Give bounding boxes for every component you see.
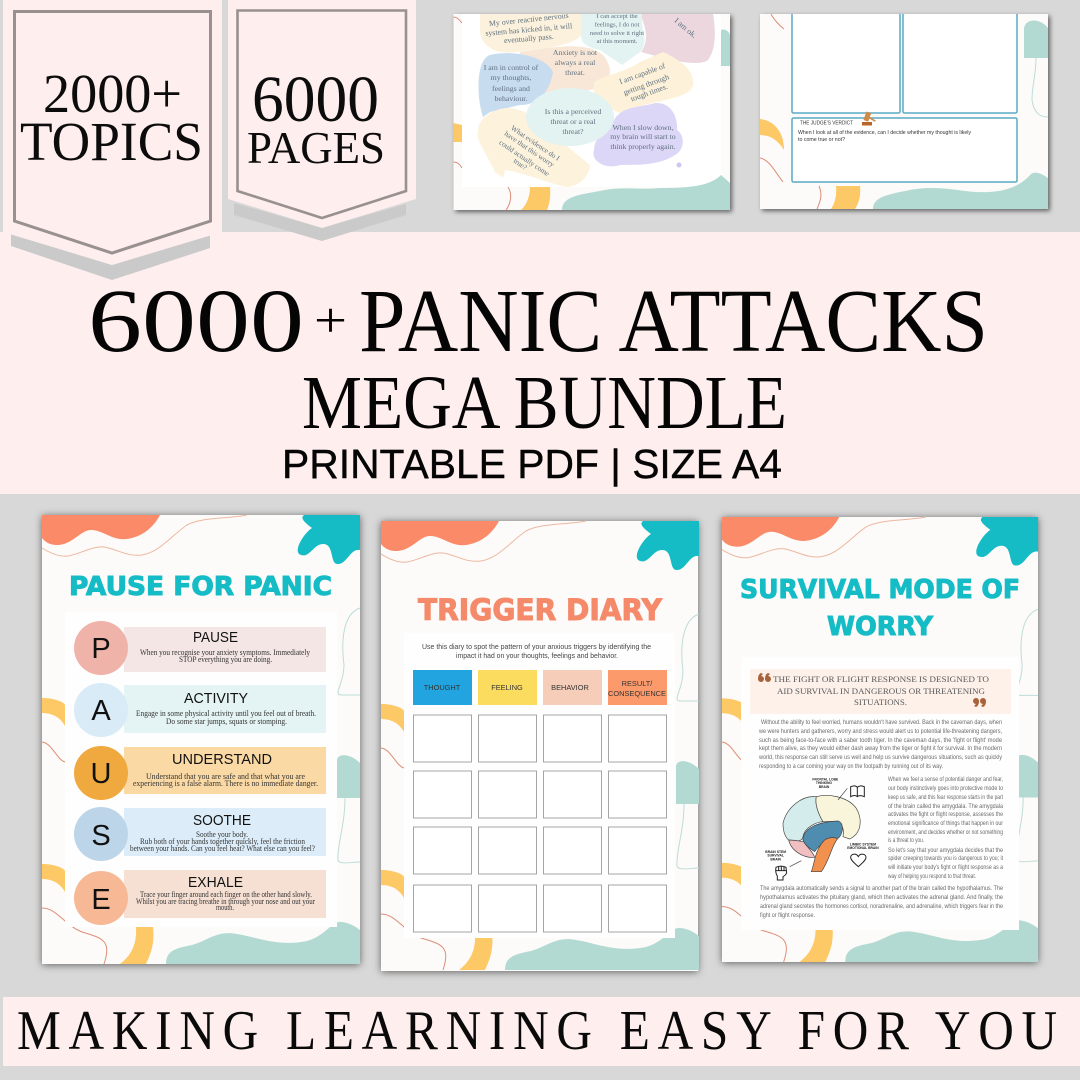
row: exhale: EXHALE xyxy=(188,874,243,891)
body text: right column: will initiate your body's fight or flight response as a xyxy=(887,865,1004,871)
body text: right column: way of helping you respond to that threat. xyxy=(887,874,976,880)
row: understand: experiencing is a false alarm. There is no immediate danger. xyxy=(133,779,318,788)
subtitle: mega bundle: MEGA BUNDLE xyxy=(302,361,787,445)
body text: right column: keep us safe, and this fear response starts in the part xyxy=(888,795,1003,801)
row: activity: ACTIVITY xyxy=(184,690,248,707)
affirmation text xyxy=(484,11,699,178)
body text: closing paragraph xyxy=(760,886,1004,919)
row: soothe xyxy=(74,807,326,861)
row: exhale xyxy=(74,870,326,925)
answer box right xyxy=(903,10,1017,113)
title xyxy=(88,272,988,371)
icon: gavel xyxy=(862,112,876,126)
body text: intro paragraph: we were hunters and gatherers, worry and stress would alert us to potential life-threatening dangers, xyxy=(758,729,1002,735)
column headers: RESULT/ xyxy=(622,679,653,688)
affirmation text: I can accept the xyxy=(596,13,638,20)
row: soothe: Rub both of your hands together quickly, feel the friction xyxy=(140,837,305,846)
row: understand: U xyxy=(91,758,111,790)
banner: 6000 pages xyxy=(228,0,416,241)
row: pause xyxy=(74,621,326,675)
affirmation text: getting through xyxy=(622,72,670,97)
affirmation text: have that this worry xyxy=(503,129,556,169)
column headers xyxy=(413,670,667,705)
brain labels: SURVIVAL xyxy=(767,854,784,858)
body text: right column xyxy=(887,777,1004,880)
banner: 6000 pages: 6000 xyxy=(252,63,379,136)
brain diagram xyxy=(765,777,879,880)
affirmation text: threat. xyxy=(565,68,585,77)
icon: fist xyxy=(776,866,787,880)
row: understand: UNDERSTAND xyxy=(172,751,272,768)
intro text: impact it had on your thoughts, feelings and behavior. xyxy=(456,651,618,660)
affirmation text: Anxiety is not xyxy=(553,48,598,57)
row: soothe: S xyxy=(91,820,111,852)
body text: right column: environment, and decides whether or not something xyxy=(888,830,1003,836)
body text: closing paragraph: fight or flight response. xyxy=(760,913,815,919)
body text: right column: So let's say that your amygdala decides that the xyxy=(888,848,1004,854)
row: exhale: mouth. xyxy=(216,903,234,912)
banner: 2000+ topics: 2000+ xyxy=(43,63,182,124)
title: PANIC ATTACKS xyxy=(359,272,988,371)
row: activity: Do some star jumps, squats or stomping. xyxy=(166,717,287,726)
brain labels xyxy=(765,777,879,861)
row: exhale: Whilst you are tracing breathe in through your nose and out your xyxy=(136,897,315,906)
column headers: FEELING xyxy=(491,683,523,692)
row: pause: When you recognise your anxiety symptoms. Immediately xyxy=(140,648,310,657)
verdict box: to come true or not? xyxy=(798,137,845,143)
row: activity: A xyxy=(91,695,111,727)
pull quote: THE FIGHT OR FLIGHT RESPONSE IS DESIGNED TO xyxy=(773,674,989,684)
top preview card: judge's verdict worksheet xyxy=(760,10,1048,209)
pull quote: AID SURVIVAL IN DANGEROUS OR THREATENING xyxy=(777,686,985,696)
intro text: Use this diary to spot the pattern of your anxious triggers by identifying the xyxy=(422,642,651,651)
row: soothe: between your hands. Can you feel heat? What else can you feel? xyxy=(130,844,315,853)
heading: survival mode of worry xyxy=(740,575,1020,642)
body text: closing paragraph: hypothalamus activates the pituitary gland, which then activates the adrenal gland. And finally, the xyxy=(760,895,1004,901)
verdict box: When I look at all of the evidence, can I decide whether my thought is likely xyxy=(798,130,972,136)
subtitle: printable pdf: PRINTABLE PDF | SIZE A4 xyxy=(282,441,782,487)
brain labels: EMOTIONAL BRAIN xyxy=(847,846,879,850)
row: pause: PAUSE xyxy=(193,629,238,646)
row: pause: P xyxy=(91,633,111,665)
body text: right column: is a threat to you. xyxy=(888,838,924,844)
affirmation text: When I slow down, xyxy=(612,123,674,132)
title: 6000 xyxy=(88,272,304,371)
affirmation text: true? xyxy=(512,156,529,172)
body text: right column: our body instinctively goes into protective mode to xyxy=(888,786,1004,792)
affirmation text: tough times. xyxy=(629,82,669,103)
pink title band xyxy=(0,232,1080,494)
brain labels: BRAIN xyxy=(770,857,782,861)
row: exhale: Trace your finger around each finger on the other hand slowly. xyxy=(140,890,312,899)
body text: right column: emotional significance of things that happen in our xyxy=(888,821,1003,827)
body text: right column: of the brain called the amygdala. The amygdala xyxy=(888,804,1004,810)
affirmation text: behaviour. xyxy=(495,94,527,103)
heading: survival mode of worry: WORRY xyxy=(827,612,934,642)
body text: right column: spider creeping towards you is dangerous to you; it xyxy=(888,856,1003,862)
affirmation text: my thoughts, xyxy=(491,73,531,82)
column headers: CONSEQUENCE xyxy=(608,689,666,698)
brain labels: THINKING xyxy=(816,781,832,785)
icon: heart xyxy=(851,854,866,867)
affirmation text: threat or a real xyxy=(550,117,596,126)
footer band: MAKING LEARNING EASY FOR YOU xyxy=(17,1000,1057,1062)
affirmation text: Is this a perceived xyxy=(545,107,601,116)
row: exhale: E xyxy=(91,884,111,916)
body text: intro paragraph: such as being face-to-face with a saber tooth tiger. In the caveman days, the 'fight or flight' mode xyxy=(759,738,1003,744)
icon: book xyxy=(851,786,864,797)
row: pause: STOP everything you are doing. xyxy=(179,655,272,664)
row: activity xyxy=(74,683,326,737)
body text: right column: activates the fight or flight response, assesses the xyxy=(888,812,1004,818)
affirmation text: I am in control of xyxy=(484,63,539,72)
answer box left xyxy=(792,10,900,113)
affirmation text: My over reactive nervous xyxy=(489,11,569,28)
row: soothe: SOOTHE xyxy=(193,812,251,829)
intro text xyxy=(422,642,651,660)
banner: 2000+ topics xyxy=(3,0,222,280)
row: understand xyxy=(74,746,326,800)
brain labels: FRONTAL LOBE xyxy=(812,777,839,781)
body text: intro paragraph: responding to a car coming your way on the footpath by running out of its way. xyxy=(759,764,943,770)
banner: 6000 pages: PAGES xyxy=(247,123,385,173)
brain labels: BRAIN xyxy=(819,785,830,789)
affirmation text: eventually pass. xyxy=(504,32,554,45)
pull quote: SITUATIONS. xyxy=(854,697,907,707)
panel: survival mode of worry page xyxy=(722,517,1038,962)
affirmation text: my brain will start to xyxy=(610,132,676,141)
heading: pause for panic: PAUSE FOR PANIC xyxy=(69,572,332,602)
affirmation text: need to solve it right xyxy=(590,30,644,37)
banner: 2000+ topics: TOPICS xyxy=(20,111,203,172)
body text: closing paragraph: The amygdala automatically sends a signal to another part of the brain called the hypothalamus. The xyxy=(760,886,1004,892)
row: activity: Engage in some physical activity until you feel out of breath. xyxy=(136,709,316,718)
speech bubbles xyxy=(477,14,715,187)
affirmation text: I am capable of xyxy=(618,61,667,86)
top preview card: affirmations worksheet xyxy=(453,11,730,210)
body text: intro paragraph: world, this response can still serve us well and help us survive dangerous situations, such as quickly xyxy=(758,755,1002,761)
body text: right column: When we feel a sense of potential danger and fear, xyxy=(888,777,1003,783)
row: soothe: Soothe your body. xyxy=(196,830,248,839)
affirmation text: feelings and xyxy=(492,84,530,93)
affirmation text: think properly again. xyxy=(610,142,676,151)
affirmation text: I am ok. xyxy=(673,16,699,40)
affirmation text: feelings, I do not xyxy=(595,22,640,28)
body text: intro paragraph: kept them alive, as they would either dash away from the tiger or fight it for survival. In the modern xyxy=(759,746,1002,752)
column headers: THOUGHT xyxy=(424,683,461,692)
affirmation text: could actually come xyxy=(498,138,551,178)
column headers: BEHAVIOR xyxy=(551,683,589,692)
heading: survival mode of worry: SURVIVAL MODE OF xyxy=(740,575,1020,605)
body text: closing paragraph: adrenal gland secretes the hormones cortisol, noradrenaline, and adrenaline, which triggers fear in the xyxy=(760,904,1004,910)
brain labels: LIMBIC SYSTEM xyxy=(850,842,876,846)
panel: pause for panic page xyxy=(42,515,360,964)
row: understand: Understand that you are safe and that what you are xyxy=(146,772,305,781)
affirmation text: threat? xyxy=(562,127,584,136)
title: + xyxy=(314,292,347,348)
pull quote xyxy=(750,669,1011,714)
affirmation text: What evidence do I xyxy=(509,123,562,163)
affirmation text: system has kicked in, it will xyxy=(485,21,573,38)
panel: trigger diary page xyxy=(381,521,699,971)
verdict box xyxy=(792,118,1017,182)
verdict box: THE JUDGE'S VERDICT xyxy=(800,120,853,126)
body text: intro paragraph xyxy=(758,720,1003,770)
affirmation text: at this moment. xyxy=(597,38,638,45)
diary grid xyxy=(414,715,666,932)
brain labels: BRAIN STEM xyxy=(765,850,786,854)
affirmation text: always a real xyxy=(555,58,596,67)
heading: trigger diary: TRIGGER DIARY xyxy=(418,593,663,627)
body text: intro paragraph: Without the ability to feel worried, humans wouldn't have survived. Back in the caveman days, when xyxy=(761,720,1002,726)
